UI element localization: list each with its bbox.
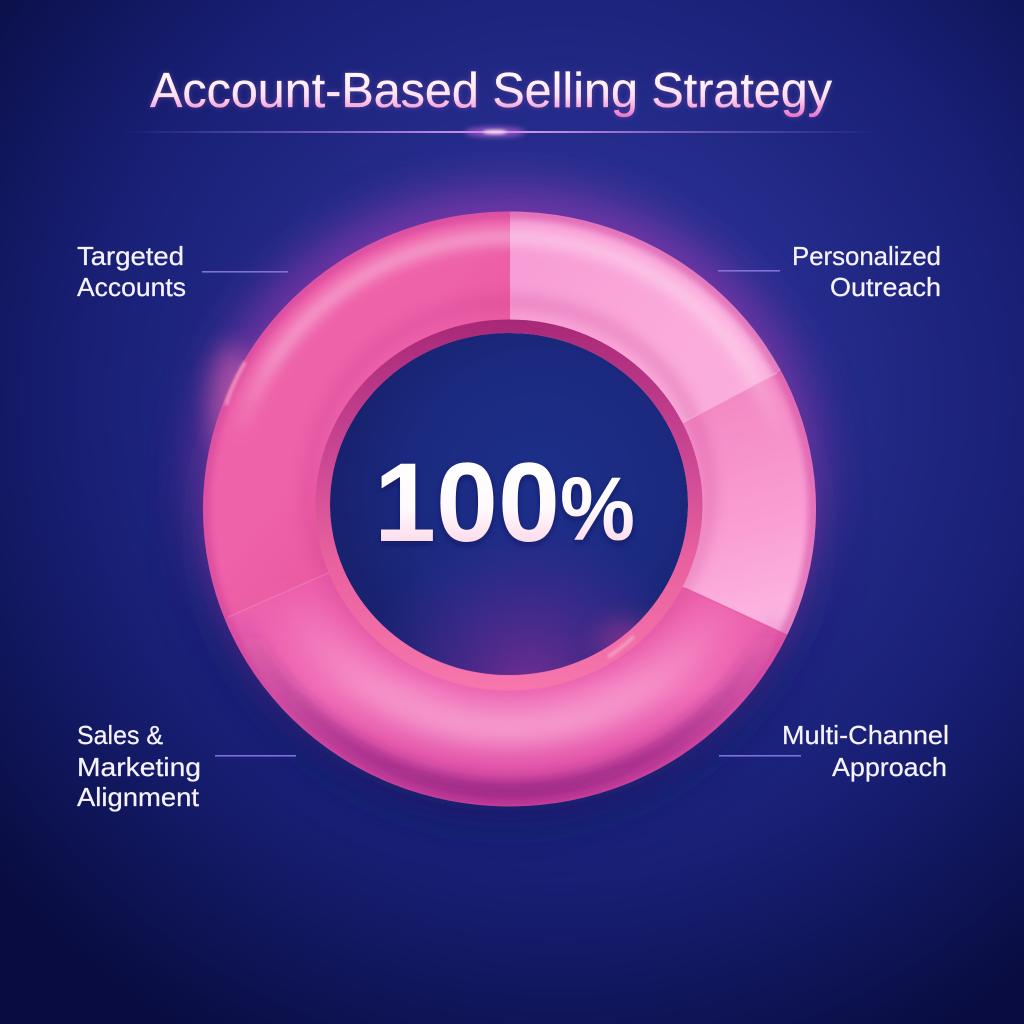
label: Sales & Marketing Alignment: Alignment xyxy=(77,782,200,812)
title underline xyxy=(120,127,880,137)
label: Sales & Marketing Alignment xyxy=(77,720,296,812)
centre value: % xyxy=(560,463,635,563)
title: Account-Based Selling Strategy xyxy=(150,64,832,118)
label: Targeted Accounts: Targeted xyxy=(77,241,184,271)
donut chart xyxy=(169,162,847,828)
centre value: 100 xyxy=(374,443,560,568)
label: Personalized Outreach: Personalized xyxy=(792,241,941,271)
bevel sheen xyxy=(608,636,634,657)
inner bevel xyxy=(323,327,695,683)
inner upper shade xyxy=(510,292,719,590)
ring lower highlight xyxy=(294,612,724,759)
label: Sales & Marketing Alignment: Marketing xyxy=(77,752,201,782)
segment dividers xyxy=(228,572,330,617)
ring lower shade xyxy=(240,620,782,806)
label: Targeted Accounts xyxy=(77,241,288,302)
segment: Targeted Accounts xyxy=(203,212,510,618)
label: Personalized Outreach: Outreach xyxy=(830,272,941,302)
ring rim shade xyxy=(204,213,814,805)
ring top highlight xyxy=(240,223,776,423)
label: Targeted Accounts: Accounts xyxy=(77,272,186,302)
title: Account-Based Selling Strategy xyxy=(150,64,832,118)
label: Sales & Marketing Alignment: Sales & xyxy=(77,720,163,750)
left glow xyxy=(210,345,254,455)
centre value: % xyxy=(560,460,635,560)
centre value: 100 xyxy=(374,440,560,565)
left highlight xyxy=(226,362,245,405)
centre value xyxy=(374,440,635,568)
segment: right xyxy=(668,370,816,635)
label: Personalized Outreach xyxy=(718,241,941,302)
label: Multi-Channel Approach xyxy=(719,720,949,782)
label: Multi-Channel Approach: Multi-Channel xyxy=(782,720,949,750)
label: Multi-Channel Approach: Approach xyxy=(832,752,947,782)
segment: Personalized Outreach xyxy=(510,212,781,430)
ring drop shadow xyxy=(197,232,821,828)
segment: Multi-Channel Approach xyxy=(224,566,787,806)
centre hole xyxy=(327,330,691,678)
ring glow xyxy=(197,190,821,770)
